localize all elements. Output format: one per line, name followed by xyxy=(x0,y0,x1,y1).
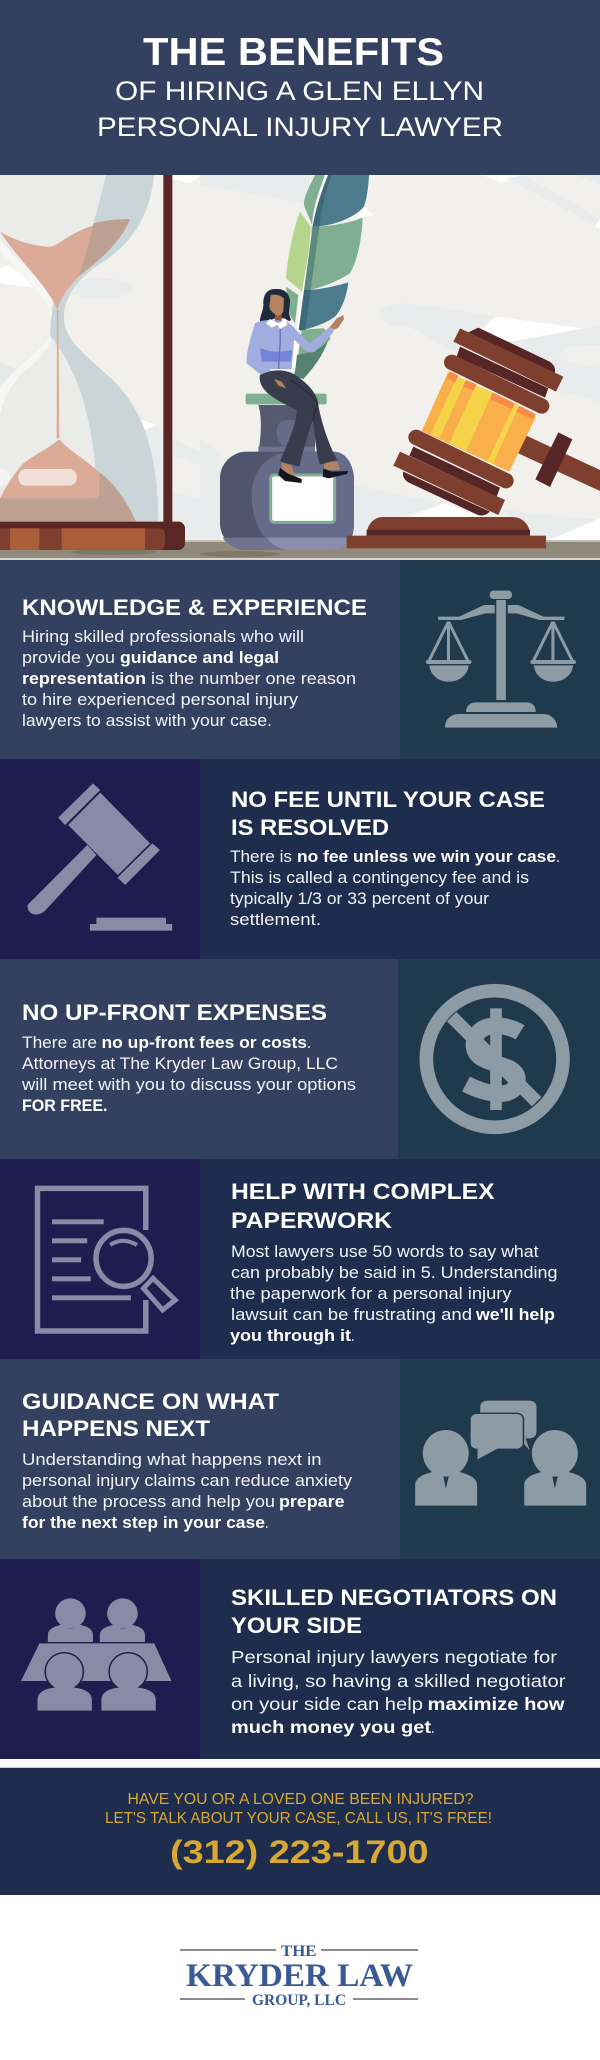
subtitle line two: PERSONAL INJURY LAWYER xyxy=(97,112,503,142)
heading: SKILLED NEGOTIATORS ON xyxy=(231,1585,557,1610)
panel: guidance on what happens next xyxy=(0,1359,600,1559)
body text: is the number one reason xyxy=(151,670,356,688)
body text: personal injury claims can reduce anxiety xyxy=(22,1472,353,1490)
body text: Most lawyers use 50 words to say what xyxy=(231,1243,539,1261)
ink bottle xyxy=(220,394,354,550)
body text: no up-front fees or costs xyxy=(102,1034,307,1052)
panel: knowledge and experience xyxy=(0,560,600,759)
body text: FOR FREE. xyxy=(22,1097,108,1115)
hourglass xyxy=(0,175,185,550)
heading: HELP WITH COMPLEX xyxy=(231,1179,494,1204)
body text xyxy=(22,628,356,730)
body text: Attorneys at The Kryder Law Group, LLC xyxy=(22,1055,338,1073)
body text: guidance and legal xyxy=(120,649,279,667)
body text: This is called a contingency fee and is xyxy=(230,869,529,887)
logo: the kryder law group xyxy=(180,1943,418,2009)
call to action text: HAVE YOU OR A LOVED ONE BEEN INJURED? xyxy=(128,1791,474,1808)
body text: typically 1/3 or 33 percent of your xyxy=(230,890,490,908)
icon: gavel xyxy=(28,783,172,931)
heading xyxy=(22,1389,279,1441)
body text: lawyers to assist with your case. xyxy=(22,712,272,730)
title: the benefits: THE BENEFITS xyxy=(143,31,444,74)
logo: the kryder law group: KRYDER LAW xyxy=(186,1958,413,1994)
clouds, right section xyxy=(400,175,600,541)
body text: we'll help xyxy=(475,1306,555,1324)
body text: lawsuit can be frustrating and xyxy=(231,1306,472,1324)
ground xyxy=(0,540,600,560)
icon: document with magnifier xyxy=(37,1188,175,1331)
icon: scales of justice xyxy=(426,591,576,728)
heading xyxy=(231,1585,557,1638)
panel: complex paperwork xyxy=(0,1159,600,1359)
body text: There is xyxy=(230,848,292,866)
heading: HAPPENS NEXT xyxy=(22,1416,210,1441)
body text: settlement. xyxy=(230,911,321,929)
woman sitting on bottle xyxy=(247,289,348,483)
panel: skilled negotiators xyxy=(0,1559,600,1759)
title panel xyxy=(0,0,600,175)
body text: . xyxy=(307,1034,311,1052)
body text: representation xyxy=(22,670,146,688)
body text: for the next step in your case xyxy=(22,1514,265,1532)
body text: you through it xyxy=(230,1327,352,1345)
heading: NO FEE UNTIL YOUR CASE xyxy=(231,787,545,812)
body text xyxy=(230,1243,558,1345)
subtitle line one: OF HIRING A GLEN ELLYN xyxy=(115,76,484,106)
body text xyxy=(230,848,560,929)
heading: NO UP-FRONT EXPENSES xyxy=(22,1000,327,1025)
body text: . xyxy=(431,1717,434,1737)
body text: much money you get xyxy=(231,1717,431,1737)
body text: will meet with you to discuss your options xyxy=(21,1076,356,1094)
heading: GUIDANCE ON WHAT xyxy=(22,1389,279,1414)
icon: negotiating table xyxy=(21,1598,171,1711)
heading xyxy=(231,1179,494,1233)
call to action text: LET'S TALK ABOUT YOUR CASE, CALL US, IT'S FREE! xyxy=(105,1810,492,1827)
body text: no fee unless we win your case xyxy=(297,848,556,866)
clouds and ground, left section xyxy=(0,175,200,542)
body text xyxy=(231,1647,566,1737)
heading: PAPERWORK xyxy=(231,1208,393,1233)
body text: to hire experienced personal injury xyxy=(22,691,299,709)
phone number: (312) 223-1700 xyxy=(170,1834,428,1870)
body text: about the process and help you xyxy=(22,1493,275,1511)
body text: Understanding what happens next in xyxy=(22,1451,322,1469)
panel: no up-front expenses xyxy=(0,959,600,1159)
body text: . xyxy=(265,1514,268,1532)
body text: provide you xyxy=(22,649,115,667)
body text: can probably be said in 5. Understanding xyxy=(231,1264,558,1282)
call to action text xyxy=(105,1791,492,1827)
body text: on your side can help xyxy=(231,1694,423,1714)
body text xyxy=(22,1451,353,1532)
gavel xyxy=(347,328,600,548)
feather xyxy=(286,175,369,379)
body text: . xyxy=(556,848,560,866)
logo: the kryder law group: THE xyxy=(281,1943,316,1960)
body text: . xyxy=(351,1327,354,1345)
heading: IS RESOLVED xyxy=(231,815,389,840)
body text: maximize how xyxy=(428,1694,565,1714)
logo: the kryder law group: GROUP, LLC xyxy=(252,1992,346,2009)
body text: the paperwork for a personal injury xyxy=(230,1285,513,1303)
hero illustration xyxy=(0,175,600,560)
clouds, centre section xyxy=(200,175,427,541)
body text: Hiring skilled professionals who will xyxy=(22,628,304,646)
icon: two people talking xyxy=(415,1401,586,1506)
heading: KNOWLEDGE & EXPERIENCE xyxy=(22,595,367,620)
icon: no dollar sign xyxy=(426,991,563,1127)
panel: no fee until resolved xyxy=(0,759,600,959)
heading xyxy=(231,787,545,840)
body text: Personal injury lawyers negotiate for xyxy=(231,1647,557,1667)
body text xyxy=(21,1034,356,1115)
body text: prepare xyxy=(279,1493,344,1511)
body text: There are xyxy=(22,1034,97,1052)
call to action panel xyxy=(0,1767,600,1895)
body text: a living, so having a skilled negotiator xyxy=(231,1671,566,1691)
heading: YOUR SIDE xyxy=(231,1613,362,1638)
